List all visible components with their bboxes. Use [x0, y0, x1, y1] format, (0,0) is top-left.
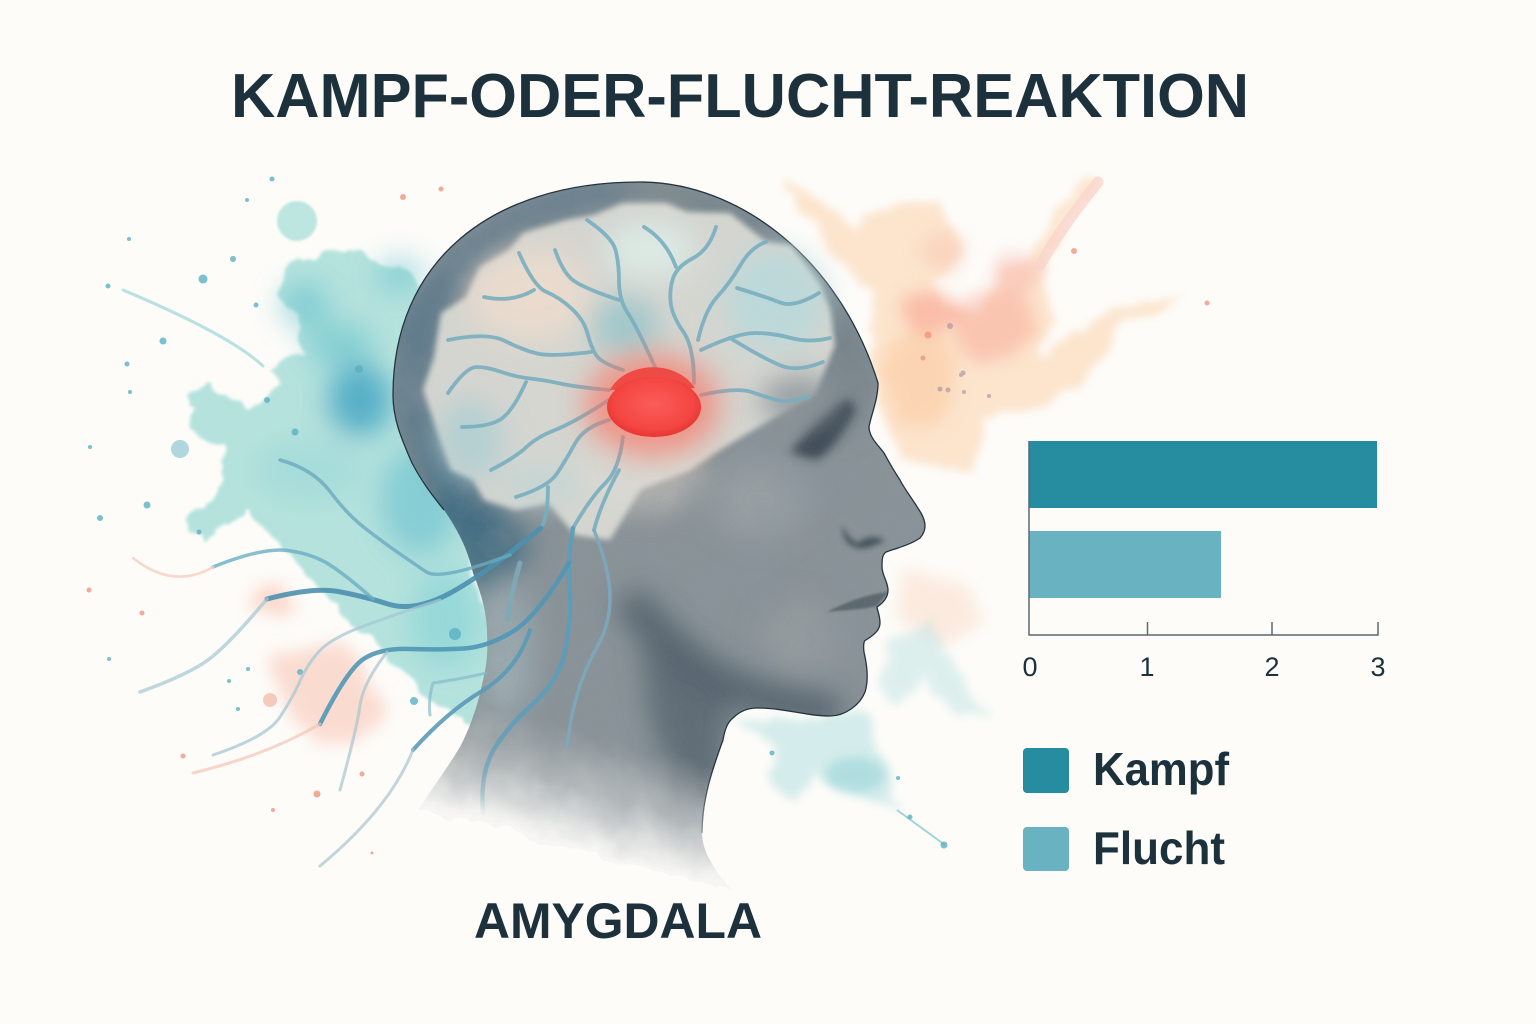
legend: [1023, 743, 1230, 874]
axis: [1029, 441, 1378, 635]
bar: Flucht: [1029, 531, 1221, 598]
bar chart: [1022, 441, 1386, 682]
legend: Kampf: Kampf: [1093, 743, 1230, 795]
neural pathways down the neck and beyond: [123, 290, 610, 866]
axis labels: 1: [1139, 652, 1155, 682]
watercolor splash: teal and peach lower right: [740, 565, 985, 845]
bar: Kampf: [1029, 441, 1377, 508]
axis labels: [1022, 652, 1386, 682]
axis labels: 2: [1264, 652, 1280, 682]
face mottling: [400, 262, 692, 552]
eye and brow shadow: [790, 398, 856, 460]
nose shadow: [842, 525, 885, 548]
brain: [423, 203, 840, 540]
lips: [827, 592, 888, 612]
axis labels: 3: [1370, 652, 1386, 682]
label: amygdala: AMYGDALA: [474, 893, 762, 949]
legend: Flucht: [1023, 822, 1225, 874]
jaw and neck shadow: [627, 597, 840, 800]
watercolor splash: coral lower left: [247, 578, 385, 745]
head silhouette: [392, 181, 926, 884]
amygdala glow and body: [584, 353, 720, 457]
watercolor splash: peach and coral right: [777, 180, 1187, 473]
neural branches in brain: [448, 220, 830, 530]
grain: [448, 410, 846, 540]
legend: Kampf: [1023, 743, 1230, 795]
paint speckles: [86, 176, 1210, 854]
legend: Flucht: Flucht: [1093, 822, 1225, 874]
watercolor splash: teal left: [187, 201, 495, 728]
title: KAMPF-ODER-FLUCHT-REAKTION: [231, 62, 1249, 131]
skull band shading: [388, 178, 885, 720]
head outline: [393, 182, 925, 833]
axis labels: 0: [1022, 652, 1038, 682]
